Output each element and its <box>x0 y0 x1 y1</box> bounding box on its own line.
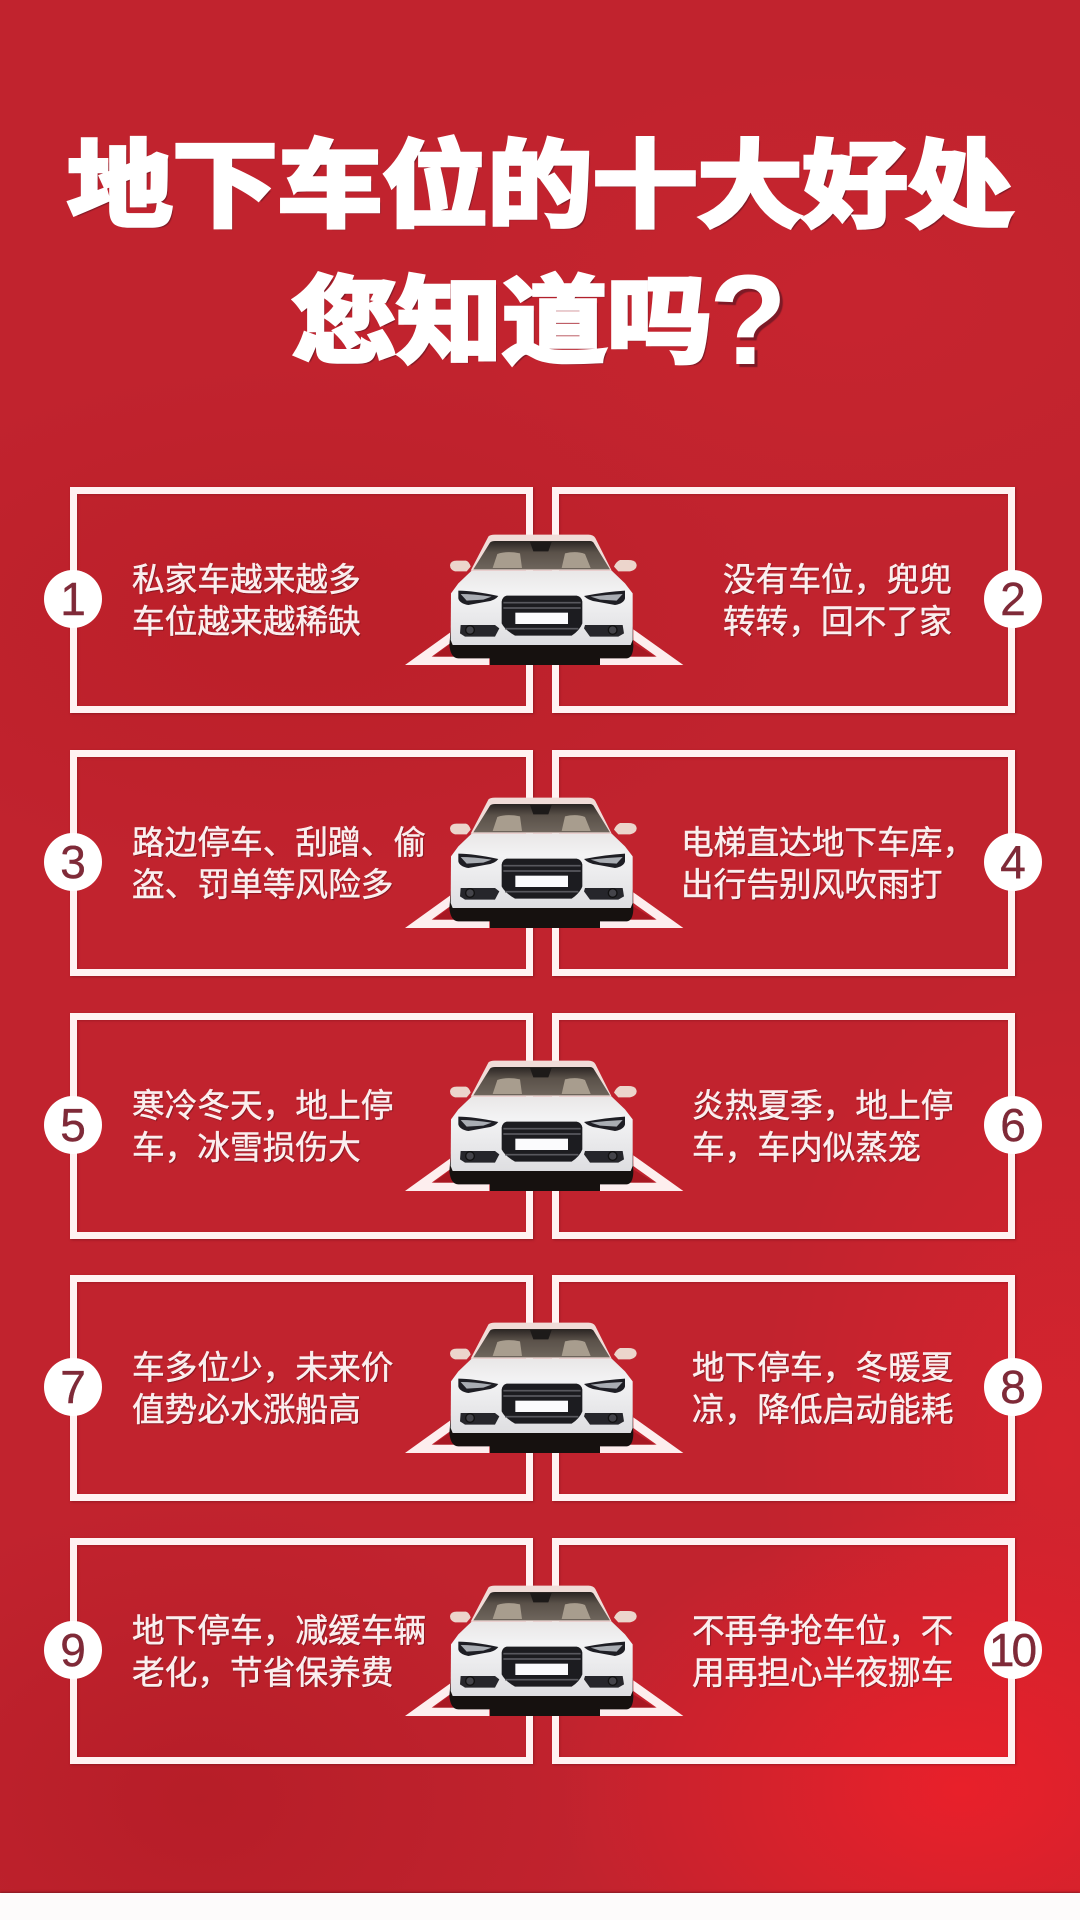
title line 2 <box>291 249 787 392</box>
text: benefit 7: 值势必水涨船高 <box>132 1391 361 1428</box>
text: benefit 3 <box>132 824 426 903</box>
number badge 10 <box>984 1621 1042 1679</box>
number badge 2 <box>984 570 1042 628</box>
text: benefit 10 <box>692 1612 954 1691</box>
number badge 5: 5 <box>60 1099 86 1151</box>
text: benefit 2: 转转，回不了家 <box>723 603 952 640</box>
text: benefit 9 <box>132 1612 426 1691</box>
number badge 7 <box>44 1358 102 1416</box>
number badge 5 <box>44 1096 102 1154</box>
number badge 6: 6 <box>1000 1099 1026 1151</box>
text: benefit 6: 炎热夏季，地上停 <box>692 1087 954 1124</box>
panel: benefit 2 <box>552 487 1042 715</box>
text: benefit 2 <box>723 561 952 640</box>
text: benefit 5: 车，冰雪损伤大 <box>132 1129 361 1166</box>
panel: benefit 6 <box>552 1013 1042 1241</box>
icon: car row 2 <box>405 798 684 928</box>
number badge 9: 9 <box>60 1624 86 1676</box>
text: benefit 4 <box>681 824 975 903</box>
text: benefit 8: 地下停车，冬暖夏 <box>692 1349 954 1386</box>
panel: benefit 1 <box>44 487 535 715</box>
text: benefit 10: 用再担心半夜挪车 <box>692 1654 954 1691</box>
text: benefit 8 <box>692 1349 954 1428</box>
text: benefit 1: 私家车越来越多 <box>132 561 361 598</box>
icon: car row 4 <box>405 1322 684 1453</box>
icon: car row 1 <box>405 534 684 665</box>
text: benefit 4: 出行告别风吹雨打 <box>681 866 942 903</box>
title line 2: 您知道吗 <box>292 270 712 375</box>
text: benefit 9: 地下停车，减缓车辆 <box>132 1612 426 1649</box>
number badge 3 <box>44 833 102 891</box>
text: benefit 5 <box>132 1087 394 1166</box>
number badge 3: 3 <box>60 836 86 888</box>
text: benefit 9: 老化，节省保养费 <box>132 1654 394 1691</box>
number badge 7: 7 <box>60 1361 86 1413</box>
text: benefit 1: 车位越来越稀缺 <box>132 603 361 640</box>
title line 2: ? <box>709 249 787 392</box>
panel: benefit 7 <box>44 1275 535 1503</box>
text: benefit 3: 路边停车、刮蹭、偷 <box>132 824 426 861</box>
number badge 1 <box>44 570 102 628</box>
number badge 4: 4 <box>1000 836 1026 888</box>
number badge 1: 1 <box>60 573 86 625</box>
text: benefit 2: 没有车位，兜兜 <box>723 561 952 598</box>
icon: car row 5 <box>405 1586 684 1716</box>
text: benefit 1 <box>132 561 361 640</box>
number badge 6 <box>984 1096 1042 1154</box>
text: benefit 6 <box>692 1087 954 1166</box>
number badge 4 <box>984 833 1042 891</box>
title line 1: 地下车位的十大好处 <box>67 134 1012 239</box>
text: benefit 10: 不再争抢车位，不 <box>692 1612 954 1649</box>
number badge 9 <box>44 1621 102 1679</box>
panel: benefit 9 <box>44 1538 535 1766</box>
bottom white strip <box>0 1893 1080 1920</box>
panel: benefit 4 <box>552 750 1042 978</box>
number badge 2: 2 <box>1000 573 1026 625</box>
text: benefit 7 <box>132 1349 394 1428</box>
panel: benefit 3 <box>44 750 535 978</box>
number badge 8 <box>984 1358 1042 1416</box>
number badge 10: 10 <box>989 1624 1034 1676</box>
icon: car row 3 <box>405 1060 684 1191</box>
panel: benefit 8 <box>552 1275 1042 1503</box>
text: benefit 3: 盗、罚单等风险多 <box>132 866 394 903</box>
text: benefit 8: 凉，降低启动能耗 <box>692 1391 954 1428</box>
text: benefit 4: 电梯直达地下车库， <box>681 824 975 861</box>
text: benefit 7: 车多位少，未来价 <box>132 1349 394 1386</box>
text: benefit 6: 车，车内似蒸笼 <box>692 1129 921 1166</box>
number badge 8: 8 <box>1000 1361 1026 1413</box>
panel: benefit 10 <box>552 1538 1042 1766</box>
text: benefit 5: 寒冷冬天，地上停 <box>132 1087 394 1124</box>
panel: benefit 5 <box>44 1013 535 1241</box>
